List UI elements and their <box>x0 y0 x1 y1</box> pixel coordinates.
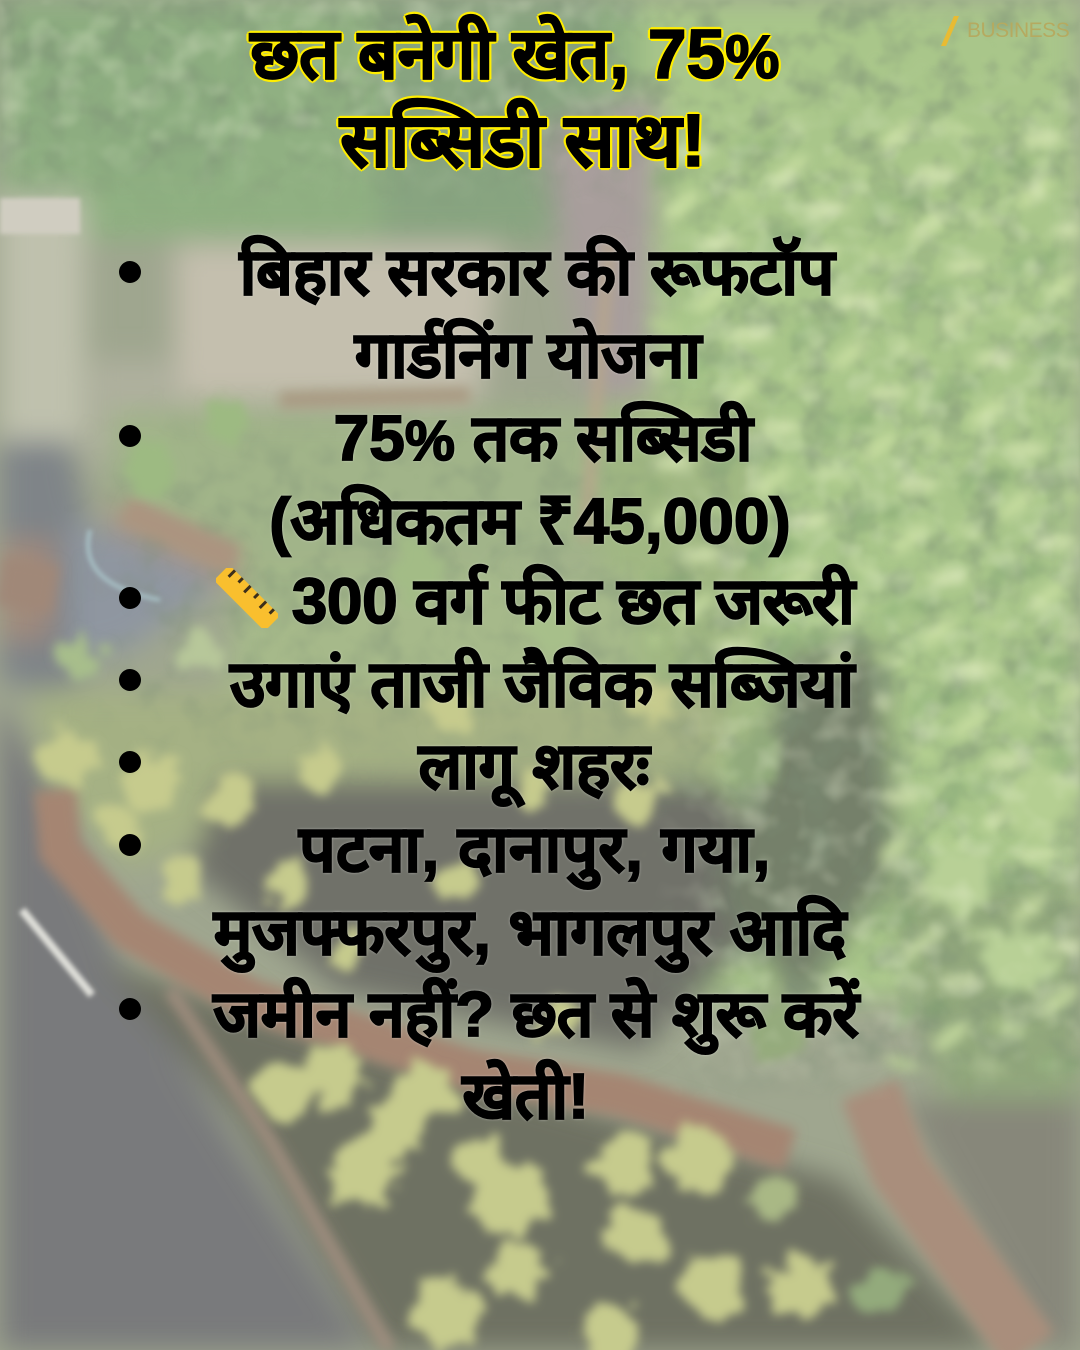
shrub clumps <box>42 400 1074 1350</box>
item 6 line 2: मुजफ्फरपुर, भागलपुर आदि <box>214 896 846 968</box>
item 1 line 2: गार्डनिंग योजना <box>355 319 701 391</box>
logo wordmark: BUSINESS <box>967 19 1069 42</box>
logo: Z Business <box>941 16 1069 46</box>
item 2 bullet <box>119 425 141 447</box>
item 7 line 1: जमीन नहीं? छत से शुरू करें <box>213 978 859 1050</box>
item 6 line 1: पटना, दानापुर, गया, <box>299 813 771 885</box>
item 5 line 1: लागू शहरः <box>419 730 649 802</box>
thin details <box>0 198 160 995</box>
rust planter edges <box>0 240 1030 1350</box>
title line 1: छत बनेगी खेत, 75% <box>250 15 780 93</box>
item 4 line 1: उगाएं ताजी जैविक सब्जियां <box>230 648 854 720</box>
item 2 line 1: 75% तक सब्सिडी <box>334 402 752 474</box>
item 4 bullet <box>119 669 141 691</box>
item 5 bullet <box>119 751 141 773</box>
item 7 line 2: खेती! <box>463 1060 589 1132</box>
bullet list <box>119 234 862 1132</box>
leaves on the right <box>650 120 1080 1070</box>
logo slash mark <box>941 16 959 46</box>
item 3 bullet <box>119 587 141 609</box>
item 1 bullet <box>119 261 141 283</box>
item 7 bullet <box>119 998 141 1020</box>
item 3 line 1: 300 वर्ग फीट छत जरूरी <box>292 565 854 637</box>
icon: ruler <box>216 568 278 628</box>
item 6 bullet <box>119 834 141 856</box>
item 2 line 2: (अधिकतम ₹45,000) <box>269 485 791 557</box>
title line 2: सब्सिडी साथ! <box>340 99 706 182</box>
title <box>246 12 781 182</box>
item 1 line 1: बिहार सरकार की रूफटॉप <box>240 236 834 308</box>
